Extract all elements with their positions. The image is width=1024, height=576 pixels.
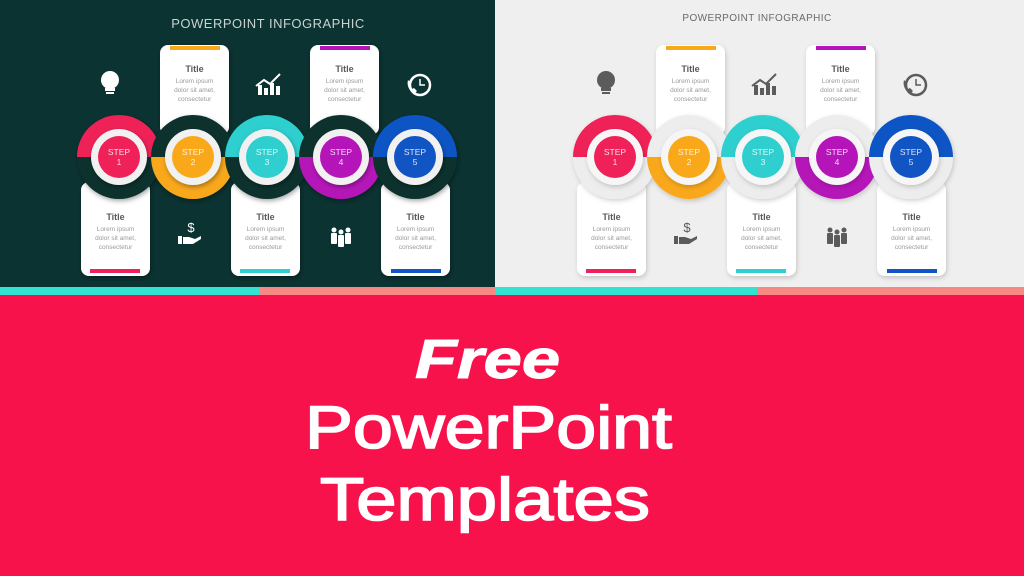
icons: light: $ (683, 220, 691, 235)
banner heading (305, 328, 672, 533)
step chain: dark: STEP (404, 147, 426, 157)
banner heading: Free (415, 328, 560, 390)
card texts: light: consectetur (824, 96, 858, 103)
card texts: dark: consectetur (178, 96, 212, 103)
card texts: light: Lorem ipsum (822, 78, 859, 85)
panel: dark infographic (0, 0, 495, 288)
card texts: light: Title (681, 64, 700, 74)
cards: light (577, 45, 946, 276)
card texts: light: Title (831, 64, 850, 74)
card texts: dark: Title (335, 64, 354, 74)
card texts: light: Lorem ipsum (672, 78, 709, 85)
card texts: light: dolor sit amet, (741, 235, 782, 242)
step chain: dark: STEP (108, 147, 130, 157)
card texts: dark: Title (256, 212, 275, 222)
card texts: dark: dolor sit amet, (324, 87, 365, 94)
step chain: light: STEP (826, 147, 848, 157)
card texts: light: Lorem ipsum (743, 226, 780, 233)
step chain: dark: 4 (339, 157, 344, 167)
step chain: light (573, 115, 953, 199)
step chain: light: STEP (678, 147, 700, 157)
card texts: dark: dolor sit amet, (174, 87, 215, 94)
card texts: dark: Title (406, 212, 425, 222)
card texts: light: Title (902, 212, 921, 222)
step chain: dark: 5 (413, 157, 418, 167)
step chain: light: 3 (761, 157, 766, 167)
card texts: light: dolor sit amet, (591, 235, 632, 242)
icons: dark: $ (187, 220, 195, 235)
panel: light infographic (495, 0, 1024, 288)
icons: light (597, 71, 926, 247)
icons: dark (101, 71, 430, 247)
step chain: light: 1 (613, 157, 618, 167)
step chain: light: STEP (604, 147, 626, 157)
card texts: light: consectetur (745, 244, 779, 251)
card texts: light: dolor sit amet, (891, 235, 932, 242)
card texts: dark: Lorem ipsum (326, 78, 363, 85)
card texts: dark: dolor sit amet, (395, 235, 436, 242)
card texts: dark: consectetur (399, 244, 433, 251)
card texts: dark: Lorem ipsum (176, 78, 213, 85)
accent stripes (0, 287, 1024, 295)
card texts: dark (95, 64, 436, 251)
banner heading: Templates (320, 466, 650, 533)
card texts: dark: consectetur (99, 244, 133, 251)
card texts: dark: dolor sit amet, (95, 235, 136, 242)
card texts: dark: consectetur (249, 244, 283, 251)
card texts: light: Lorem ipsum (593, 226, 630, 233)
step chain: light: STEP (900, 147, 922, 157)
step chain: dark: 2 (191, 157, 196, 167)
card texts: dark: Title (185, 64, 204, 74)
card texts: dark: Lorem ipsum (247, 226, 284, 233)
step chain: light: STEP (752, 147, 774, 157)
step chain: light: 5 (909, 157, 914, 167)
card texts: dark: consectetur (328, 96, 362, 103)
step chain: dark: 3 (265, 157, 270, 167)
card texts: light: Title (752, 212, 771, 222)
step chain: dark: STEP (330, 147, 352, 157)
step chain: dark: 1 (117, 157, 122, 167)
step chain: light: 4 (835, 157, 840, 167)
card texts: light: consectetur (895, 244, 929, 251)
card texts: dark: dolor sit amet, (245, 235, 286, 242)
title: light panel: POWERPOINT INFOGRAPHIC (682, 13, 832, 24)
step chain: dark: STEP (256, 147, 278, 157)
card texts: light: consectetur (674, 96, 708, 103)
title: dark panel: POWERPOINT INFOGRAPHIC (171, 16, 365, 31)
card texts: light (591, 64, 932, 251)
cards: dark (81, 45, 450, 276)
card texts: light: Title (602, 212, 621, 222)
step chain: dark (77, 115, 457, 199)
card texts: dark: Title (106, 212, 125, 222)
card texts: dark: Lorem ipsum (397, 226, 434, 233)
step chain: dark: STEP (182, 147, 204, 157)
banner heading: PowerPoint (305, 394, 672, 461)
card texts: light: consectetur (595, 244, 629, 251)
card texts: light: Lorem ipsum (893, 226, 930, 233)
card texts: light: dolor sit amet, (820, 87, 861, 94)
card texts: light: dolor sit amet, (670, 87, 711, 94)
card texts: dark: Lorem ipsum (97, 226, 134, 233)
step chain: light: 2 (687, 157, 692, 167)
